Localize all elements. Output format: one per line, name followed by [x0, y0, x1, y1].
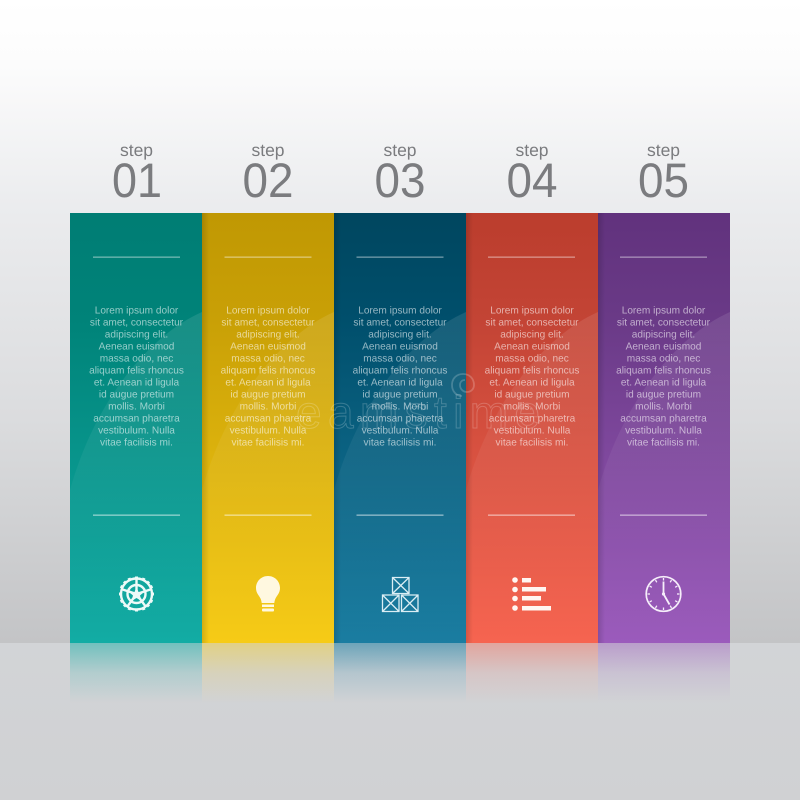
text: step 01 body — [89, 306, 184, 448]
text: step 01 body: vestibulum. Nulla — [98, 426, 175, 436]
panel: step 04 red — [466, 213, 598, 643]
step heading 05: step — [647, 140, 680, 160]
text: step 04 body: massa odio, nec — [495, 354, 569, 364]
text: step 04 body: adipiscing elit. — [500, 330, 564, 340]
step heading 04: 04 — [506, 154, 558, 208]
text: step 01 body: mollis. Morbi — [108, 402, 165, 412]
text: step 04 body: aliquam felis rhoncus — [485, 366, 579, 376]
panel: step 03 blue — [334, 213, 466, 643]
step heading 05: 05 — [638, 154, 689, 208]
step heading 01: 01 — [112, 154, 162, 208]
text: step 01 body: Lorem ipsum dolor — [95, 306, 179, 316]
step heading 02: 02 — [242, 154, 294, 208]
text: step 05 body: sit amet, consectetur — [617, 318, 711, 328]
text: step 05 body: Aenean euismod — [626, 342, 701, 352]
text: step 02 body: Lorem ipsum dolor — [226, 306, 310, 316]
text: step 03 body: id augue pretium — [362, 390, 438, 400]
reflections on floor — [70, 643, 730, 703]
text: step 01 body: massa odio, nec — [100, 354, 173, 364]
text: step 05 body: vitae facilisis mi. — [627, 438, 700, 448]
icon: stacked boxes — [382, 578, 418, 612]
text: step 04 body — [485, 306, 579, 448]
text: step 05 body: Lorem ipsum dolor — [622, 306, 706, 316]
text: step 03 body — [353, 306, 447, 448]
text: step 04 body: et. Aenean id ligula — [489, 378, 575, 388]
text: step 04 body: vestibulum. Nulla — [494, 426, 571, 436]
watermark: eamstime — [296, 386, 540, 438]
text: step 05 body: id augue pretium — [626, 390, 701, 400]
text: step 02 body: adipiscing elit. — [236, 330, 300, 340]
panel: step 01 teal — [70, 213, 202, 643]
step heading 03: step — [383, 140, 417, 160]
text: step 03 body: et. Aenean id ligula — [357, 378, 443, 388]
text: step 04 body: id augue pretium — [494, 390, 570, 400]
text: step 01 body: aliquam felis rhoncus — [89, 366, 184, 376]
text: step 03 body: vestibulum. Nulla — [362, 426, 439, 436]
text: step 05 body: adipiscing elit. — [632, 330, 695, 340]
text: step 03 body: vitae facilisis mi. — [364, 438, 436, 448]
text: step 01 body: sit amet, consectetur — [90, 318, 184, 328]
step heading 04: step — [515, 140, 549, 160]
step heading 03: 03 — [374, 154, 426, 208]
text: step 02 body: vestibulum. Nulla — [230, 426, 307, 436]
text: step 02 body: sit amet, consectetur — [221, 318, 315, 328]
floor — [0, 643, 800, 800]
text: step 05 body: massa odio, nec — [627, 354, 700, 364]
text: step 01 body: et. Aenean id ligula — [94, 378, 180, 388]
panel: step 05 purple — [598, 213, 730, 643]
text: step 02 body — [221, 306, 315, 448]
text: step 01 body: accumsan pharetra — [93, 414, 180, 424]
text: step 02 body: et. Aenean id ligula — [225, 378, 311, 388]
text: step 03 body: aliquam felis rhoncus — [353, 366, 447, 376]
step heading 01: step — [120, 140, 153, 160]
text: step 01 body: vitae facilisis mi. — [100, 438, 173, 448]
text: step 04 body: sit amet, consectetur — [485, 318, 579, 328]
text: step 02 body: Aenean euismod — [230, 342, 306, 352]
icon: light bulb — [256, 576, 280, 612]
text: step 04 body: accumsan pharetra — [489, 414, 576, 424]
text: step 05 body: vestibulum. Nulla — [625, 426, 702, 436]
text: step 01 body: Aenean euismod — [99, 342, 174, 352]
text: step 03 body: adipiscing elit. — [368, 330, 432, 340]
text: step 04 body: mollis. Morbi — [504, 402, 560, 412]
text: step 01 body: adipiscing elit. — [105, 330, 168, 340]
text: step 03 body: Aenean euismod — [362, 342, 438, 352]
text: step 03 body: massa odio, nec — [363, 354, 437, 364]
text: step 02 body: accumsan pharetra — [225, 414, 312, 424]
text: step 05 body: mollis. Morbi — [635, 402, 692, 412]
icon: gear — [119, 576, 154, 612]
text: step 03 body: sit amet, consectetur — [353, 318, 447, 328]
icon: clock — [646, 577, 681, 611]
text: step 05 body: aliquam felis rhoncus — [616, 366, 711, 376]
step heading 02: step — [251, 140, 285, 160]
text: step 03 body: mollis. Morbi — [372, 402, 428, 412]
text: step 02 body: vitae facilisis mi. — [232, 438, 304, 448]
text: step 05 body: accumsan pharetra — [620, 414, 707, 424]
text: step 03 body: Lorem ipsum dolor — [358, 306, 442, 316]
text: step 01 body: id augue pretium — [99, 390, 174, 400]
text: step 04 body: vitae facilisis mi. — [496, 438, 568, 448]
text: step 05 body: et. Aenean id ligula — [621, 378, 707, 388]
text: step 02 body: mollis. Morbi — [240, 402, 296, 412]
text: step 02 body: id augue pretium — [230, 390, 306, 400]
text: step 04 body: Lorem ipsum dolor — [490, 306, 574, 316]
text: step 05 body — [616, 306, 711, 448]
icon: list — [512, 577, 551, 611]
text: step 03 body: accumsan pharetra — [357, 414, 444, 424]
panel: step 02 yellow — [202, 213, 334, 643]
text: step 04 body: Aenean euismod — [494, 342, 570, 352]
text: step 02 body: aliquam felis rhoncus — [221, 366, 315, 376]
text: step 02 body: massa odio, nec — [231, 354, 305, 364]
